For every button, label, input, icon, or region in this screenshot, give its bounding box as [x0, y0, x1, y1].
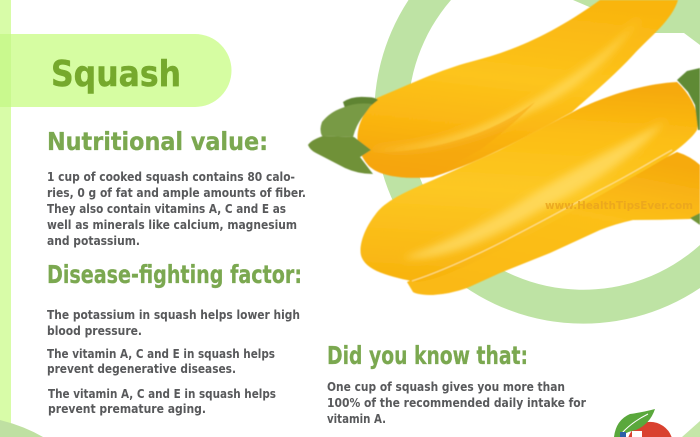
top squash — [357, 0, 678, 178]
top-right green shape — [573, 0, 700, 45]
text block: nutritional value: ries, 0 g of fat and ample amounts of fiber. — [47, 186, 306, 200]
title: Squash — [51, 54, 181, 95]
bottom squash — [407, 152, 700, 295]
bottom-left corner decoration — [0, 420, 43, 437]
middle squash — [361, 82, 698, 282]
heading: disease-fighting factor: Disease-fighting factor: — [47, 260, 302, 289]
lower leaf — [308, 136, 373, 174]
top squash lower lobe shade — [362, 102, 535, 178]
bottom-right corner decoration — [682, 421, 700, 437]
title banner — [0, 34, 232, 107]
top squash stem — [308, 97, 378, 174]
upper leaf — [320, 104, 372, 137]
middle squash highlight — [402, 122, 665, 258]
heading: did you know: Did you know that: — [327, 341, 528, 370]
text block: nutritional value: well as minerals like calcium, magnesium — [47, 218, 297, 232]
text block: premature aging: The vitamin A, C and E in squash helps — [48, 387, 276, 401]
text block: potassium — [47, 308, 300, 338]
small stem — [690, 213, 700, 225]
text block: degenerative diseases: The vitamin A, C and E in squash helps — [47, 347, 275, 361]
text block: did you know: vitamin A. — [327, 412, 386, 426]
text block: potassium: blood pressure. — [47, 324, 142, 338]
text block: nutritional value: They also contain vitamins A, C and E as — [47, 202, 286, 216]
watermark: www.HealthTipsEver.com — [545, 199, 693, 212]
text block: nutritional value: and potassium. — [47, 234, 140, 248]
middle squash seam — [412, 150, 672, 281]
text block: did you know: One cup of squash gives you more than — [327, 380, 565, 394]
text block: premature aging: prevent premature aging. — [48, 402, 206, 416]
text block: degenerative diseases: prevent degenerative diseases. — [47, 362, 236, 376]
green ring — [374, 0, 700, 324]
back leaf — [343, 97, 378, 108]
text block: nutritional value — [47, 170, 306, 248]
text block: did you know: 100% of the recommended daily intake for — [327, 396, 586, 410]
squash photo — [308, 0, 700, 295]
heading: nutritional value: Nutritional value: — [47, 127, 268, 156]
left vertical strip — [0, 0, 11, 437]
text block: degenerative diseases — [47, 347, 275, 376]
text block: potassium: The potassium in squash helps lower high — [47, 308, 300, 322]
text block: nutritional value: 1 cup of cooked squash contains 80 calo- — [47, 170, 295, 184]
text block: did you know — [327, 380, 586, 426]
icon: logo apple — [614, 409, 674, 437]
text block: premature aging — [48, 387, 276, 416]
top squash highlight — [372, 18, 640, 151]
middle squash stem — [677, 68, 700, 130]
